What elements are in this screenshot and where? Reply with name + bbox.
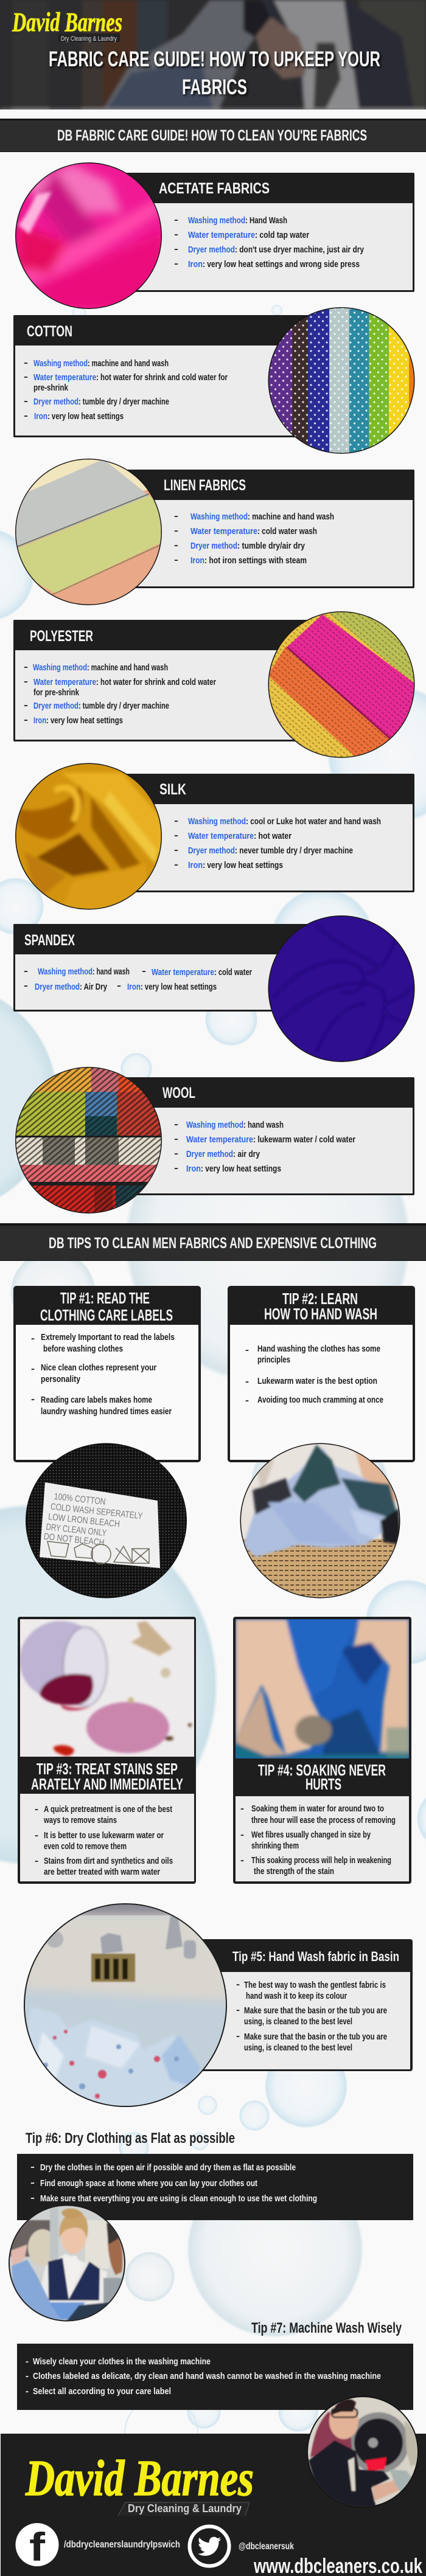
logo: Dry Cleaning & Laundry: [61, 35, 117, 43]
care list: spandex: -: [24, 981, 28, 991]
heading: linen: LINEN FABRICS: [164, 477, 246, 494]
care list: silk: Water temperature: [188, 831, 254, 841]
fabric swatch: pink acetate: [15, 162, 162, 309]
care label printed text: DO NOT BLEACH: [43, 1532, 105, 1548]
care list: cotton: [24, 358, 228, 422]
panel: tip 5: [21, 1901, 413, 2111]
tip 5 bullet list: Make sure that the basin or the tub you are: [244, 2005, 387, 2016]
heading: tip 3: ARATELY AND IMMEDIATELY: [31, 1775, 183, 1793]
tip 1 bullet list: before washing clothes: [43, 1344, 123, 1354]
care list: polyester: Water temperature: [33, 677, 96, 687]
panel: acetate fabrics: [12, 158, 414, 316]
care list: linen: -: [174, 555, 178, 565]
care label printed text: LOW LRON BLEACH: [47, 1512, 120, 1529]
tip 2 bullet list: -: [245, 1345, 249, 1355]
tip 1 bullet list: -: [31, 1333, 35, 1344]
tip 1 bullet list: personality: [41, 1374, 81, 1384]
care list: silk: -: [174, 830, 178, 841]
footer logo: Dry Cleaning & Laundry: [128, 2502, 242, 2515]
care list: silk: [174, 816, 381, 870]
care list: wool: : lukewarm water / cold water: [253, 1134, 355, 1145]
photo: soaking in water: [236, 1619, 409, 1758]
tip 7 bullet list: Select all according to your care label: [33, 2386, 171, 2397]
fabric swatch: tartan wool: [12, 1064, 164, 1217]
care list: acetate: : Hand Wash: [245, 215, 287, 226]
tip 1 bullet list: -: [31, 1394, 35, 1404]
care list: wool: -: [174, 1148, 178, 1159]
care list: cotton: Iron: [34, 411, 47, 422]
section banner: tips: [0, 1223, 426, 1261]
care list: cotton: -: [24, 396, 28, 406]
tip 2 bullet list: [245, 1344, 383, 1406]
care label printed text: [44, 1493, 142, 1546]
tip 4 bullet list: [240, 1804, 396, 1876]
care list: acetate: -: [174, 229, 178, 240]
heading: wool: WOOL: [162, 1085, 195, 1102]
logo: [12, 7, 122, 43]
heading: tip 2: HOW TO HAND WASH: [264, 1305, 377, 1323]
care list: linen: -: [174, 526, 178, 536]
photo: dry cleaning assistant: [9, 2206, 125, 2321]
heading: tip 4: HURTS: [306, 1775, 341, 1793]
panel: spandex: [13, 912, 420, 1064]
care list: acetate: [174, 215, 365, 269]
section banner: fabric care guide: [0, 119, 426, 152]
panel: tip 3: [18, 1617, 196, 1884]
tip 7 bullet list: -: [26, 2371, 29, 2381]
care list: linen: [174, 511, 334, 566]
care list: cotton: : machine and hand wash: [88, 358, 169, 369]
care list: spandex: Iron: [127, 982, 141, 992]
tip 6 bullet list: Make sure that everything you are using is clean enough to use the wet clothing: [40, 2193, 317, 2204]
care list: spandex: Dryer method: [35, 982, 80, 992]
tip 4 bullet list: shrinking them: [251, 1841, 299, 1851]
care list: silk: : never tumble dry / dryer machine: [235, 845, 353, 856]
panel: tip 4: [233, 1617, 411, 1884]
care list: acetate: Dryer method: [188, 245, 235, 255]
tip 5 bullet list: [236, 1979, 387, 2053]
care list: cotton: Water temperature: [33, 372, 96, 383]
tip 3 bullet list: Stains from dirt and synthetics and oils: [44, 1856, 173, 1866]
facebook handle: /dbdrycleanerslaundryIpswich: [64, 2540, 180, 2550]
care list: polyester: Iron: [33, 715, 46, 726]
care list: linen: Iron: [190, 555, 204, 566]
care list: acetate: Water temperature: [188, 230, 255, 240]
tip 3 bullet list: -: [35, 1856, 38, 1866]
tip 2 bullet list: Hand washing the clothes has some: [257, 1344, 380, 1354]
tip 5 bullet list: hand wash it to keep its colour: [246, 1991, 347, 2001]
care list: polyester: Washing method: [33, 662, 87, 673]
heading: acetate: ACETATE FABRICS: [159, 180, 270, 197]
header banner: [0, 0, 426, 110]
care list: acetate: -: [174, 215, 178, 225]
tip 3 bullet list: A quick pretreatment is one of the best: [44, 1804, 172, 1814]
care list: linen: Water temperature: [190, 526, 257, 536]
care list: linen: -: [174, 511, 178, 521]
care list: polyester: Dryer method: [33, 701, 79, 711]
care list: cotton: Washing method: [33, 358, 88, 369]
panel: linen fabrics: [12, 456, 414, 608]
care list: spandex: Washing method: [38, 967, 93, 977]
care list: polyester: for pre-shrink: [33, 687, 80, 698]
care list: polyester: : very low heat settings: [46, 715, 123, 726]
tip 6 bullet list: -: [30, 2178, 35, 2188]
care list: acetate: : don't use dryer machine, just air dry: [235, 245, 365, 255]
care list: wool: -: [174, 1134, 178, 1144]
tip 3 bullet list: -: [35, 1804, 38, 1814]
care list: spandex: -: [24, 966, 28, 976]
care list: silk: -: [174, 859, 178, 870]
care list: linen: Washing method: [190, 512, 248, 522]
care list: cotton: -: [24, 358, 28, 368]
care list: polyester: : tumble dry / dryer machine: [79, 701, 169, 711]
tip 4 bullet list: -: [240, 1830, 244, 1840]
care list: polyester: : machine and hand wash: [87, 662, 168, 673]
tip 2 bullet list: Lukewarm water is the best option: [257, 1376, 377, 1386]
care list: wool: Iron: [186, 1164, 201, 1174]
tip 7 bullet list: -: [26, 2386, 29, 2397]
care list: wool: -: [174, 1163, 178, 1173]
care list: wool: [174, 1119, 355, 1174]
care list: spandex: -: [142, 966, 146, 976]
care list: cotton: Dryer method: [33, 397, 79, 407]
tip 4 bullet list: Wet fibres usually changed in size by: [251, 1830, 371, 1840]
care list: linen: -: [174, 540, 178, 550]
care list: linen: : machine and hand wash: [248, 512, 334, 522]
icon: twitter: [190, 2527, 229, 2566]
care label printed text: COLD WASH SEPERATELY: [50, 1501, 143, 1521]
photo: laundry basket: [237, 1442, 402, 1600]
heading: cotton: COTTON: [27, 323, 72, 340]
care list: acetate: -: [174, 259, 178, 269]
twitter handle: @dbcleanersuk: [239, 2541, 294, 2552]
fabric swatch: indigo spandex: [268, 912, 420, 1064]
tip 3 bullet list: -: [35, 1830, 38, 1841]
care list: silk: Washing method: [188, 816, 246, 827]
tip 6 bullet list: Dry the clothes in the open air if possible and dry them as flat as possible: [40, 2162, 296, 2173]
tip 6 bullet list: -: [30, 2162, 35, 2172]
heading: tip 2: TIP #2: LEARN: [282, 1290, 358, 1308]
care list: polyester: -: [24, 676, 28, 687]
care list: wool: -: [174, 1119, 178, 1130]
care list: cotton: -: [24, 372, 28, 382]
tip 3 bullet list: ways to remove stains: [43, 1815, 117, 1825]
tip 1 bullet list: laundry washing hundred times easier: [41, 1406, 172, 1417]
care list: silk: -: [174, 845, 178, 855]
care list: cotton: pre-shrink: [33, 383, 69, 393]
care label printed text: 100% COTTON: [54, 1491, 106, 1507]
care list: acetate: : cold tap water: [255, 230, 309, 240]
tip 3 bullet list: [35, 1804, 173, 1877]
fabric swatch: polyester mesh: [268, 611, 415, 758]
care list: wool: : very low heat settings: [201, 1164, 281, 1174]
tip 5 bullet list: using, is cleaned to the best level: [244, 2043, 352, 2053]
care list: polyester: -: [24, 715, 28, 725]
care list: acetate: -: [174, 244, 178, 254]
care list: cotton: : tumble dry / dryer machine: [79, 397, 169, 407]
care list: silk: : cool or Luke hot water and hand wash: [246, 816, 381, 827]
care list: silk: : very low heat settings: [203, 860, 283, 870]
tip 1 bullet list: -: [31, 1364, 35, 1374]
footer logo: David Barnes: [25, 2450, 254, 2507]
header photo: man in suit holding garment: [0, 0, 426, 110]
heading: tip 3: TIP #3: TREAT STAINS SEP: [37, 1760, 178, 1778]
footer: [1, 2394, 426, 2576]
care list: wool: Washing method: [186, 1120, 243, 1130]
heading: tip 1: TIP #1: READ THE: [60, 1289, 150, 1307]
panel: tip 7: [17, 2344, 413, 2410]
fabric swatch: gold silk: [12, 760, 164, 912]
tip 7 bullet list: -: [26, 2356, 29, 2367]
care list: polyester: -: [24, 662, 28, 672]
care list: cotton: -: [24, 411, 28, 421]
care list: acetate: : very low heat settings and wrong side press: [203, 259, 360, 269]
tip 1 bullet list: Extremely Important to read the labels: [41, 1332, 175, 1342]
tip 5 bullet list: -: [236, 2005, 240, 2015]
care list: wool: Dryer method: [186, 1149, 233, 1159]
fabric swatch: polka dot cotton: [268, 304, 416, 456]
tip 6 bullet list: -: [30, 2193, 35, 2203]
tip 1 bullet list: Nice clean clothes represent your: [41, 1363, 156, 1373]
care list: spandex: : Air Dry: [80, 982, 108, 992]
panel: tip 2: [228, 1286, 415, 1462]
heading: tip 3: [31, 1760, 183, 1793]
care list: spandex: -: [117, 981, 121, 991]
care list: silk: Dryer method: [188, 845, 235, 856]
icon: facebook: [16, 2523, 58, 2569]
care list: spandex: : hand wash: [93, 967, 130, 977]
heading: tip 1: [40, 1289, 173, 1324]
heading: tip 2: [264, 1290, 377, 1323]
tip 5 bullet list: -: [236, 2031, 240, 2041]
panel: silk: [12, 760, 414, 912]
heading: tip 4: [258, 1761, 386, 1793]
tip 3 bullet list: It is better to use lukewarm water or: [44, 1830, 164, 1841]
tip 2 bullet list: Avoiding too much cramming at once: [257, 1395, 383, 1405]
care list: polyester: -: [24, 700, 28, 710]
care list: silk: -: [174, 816, 178, 826]
main title: FABRICS: [182, 75, 247, 99]
care list: cotton: : hot water for shrink and cold water for: [96, 372, 228, 383]
panel: wool: [12, 1064, 414, 1217]
tip 3 bullet list: are better treated with warm water: [44, 1867, 160, 1877]
heading: tip 6: Tip #6: Dry Clothing as Flat as possible: [26, 2130, 235, 2147]
tip 5 bullet list: Make sure that the basin or the tub you are: [244, 2032, 387, 2042]
panel: tip 1: [13, 1286, 201, 1462]
care list: silk: Iron: [188, 860, 203, 870]
care list: linen: : hot iron settings with steam: [204, 555, 307, 566]
care list: polyester: [24, 662, 216, 726]
care list: acetate: Washing method: [188, 215, 245, 226]
tip 4 bullet list: the strength of the stain: [254, 1866, 334, 1876]
logo: David Barnes: [12, 7, 122, 37]
care list: spandex: : cold water: [214, 967, 252, 977]
photo: woman at washing machine: [307, 2396, 419, 2508]
care list: spandex: : very low heat settings: [141, 982, 217, 992]
care list: cotton: : very low heat settings: [47, 411, 124, 422]
fabric swatch: linen: [12, 456, 164, 608]
care list: polyester: : hot water for shrink and cold water: [96, 677, 216, 687]
tip 5 bullet list: -: [236, 1979, 240, 1990]
photo: washing fabric in basin: [21, 1901, 231, 2111]
care list: linen: Dryer method: [190, 541, 237, 551]
tip 1 bullet list: Reading care labels makes home: [41, 1395, 152, 1405]
care list: spandex: [24, 966, 252, 992]
tip 2 bullet list: -: [245, 1377, 249, 1387]
tip 7 bullet list: Wisely clean your clothes in the washing machine: [33, 2356, 211, 2367]
tip 2 bullet list: principles: [257, 1355, 290, 1365]
tip 5 bullet list: using, is cleaned to the best level: [244, 2016, 352, 2027]
tip 5 bullet list: The best way to wash the gentlest fabric is: [244, 1980, 386, 1990]
panel: tip 6: [17, 2154, 413, 2220]
tip 6 bullet list: Find enough space at home where you can lay your clothes out: [40, 2178, 257, 2189]
care label printed text: DRY CLEAN ONLY: [46, 1522, 107, 1538]
care list: acetate: Iron: [188, 259, 203, 269]
icon: facebook: f: [29, 2524, 46, 2569]
heading: polyester: POLYESTER: [30, 628, 93, 645]
care list: linen: : tumble dry/air dry: [237, 541, 306, 551]
care list: silk: : hot water: [254, 831, 292, 841]
photo: clothing care label: [24, 1442, 189, 1600]
heading: tip 1: CLOTHING CARE LABELS: [40, 1306, 173, 1324]
care list: wool: Water temperature: [186, 1134, 253, 1145]
care list: linen: : cold water wash: [257, 526, 317, 536]
panel: polyester: [13, 608, 420, 766]
tip 1 bullet list: [31, 1332, 175, 1417]
main title: [49, 47, 380, 99]
tip 2 bullet list: -: [245, 1395, 249, 1406]
tip 6 bullet list: [30, 2162, 317, 2204]
tip 4 bullet list: -: [240, 1855, 244, 1866]
heading: spandex: SPANDEX: [24, 932, 75, 949]
tip 3 bullet list: even cold to remove them: [44, 1841, 127, 1852]
photo: wine stain: [19, 1619, 194, 1757]
care list: wool: : hand wash: [243, 1120, 284, 1130]
care list: spandex: Water temperature: [152, 967, 214, 977]
tip 4 bullet list: -: [240, 1804, 244, 1814]
panel: cotton: [13, 304, 416, 456]
care list: wool: : air dry: [233, 1149, 260, 1159]
tip 7 bullet list: [26, 2356, 381, 2397]
heading: silk: SILK: [159, 781, 186, 798]
tip 4 bullet list: Soaking them in water for around two to: [251, 1804, 384, 1814]
